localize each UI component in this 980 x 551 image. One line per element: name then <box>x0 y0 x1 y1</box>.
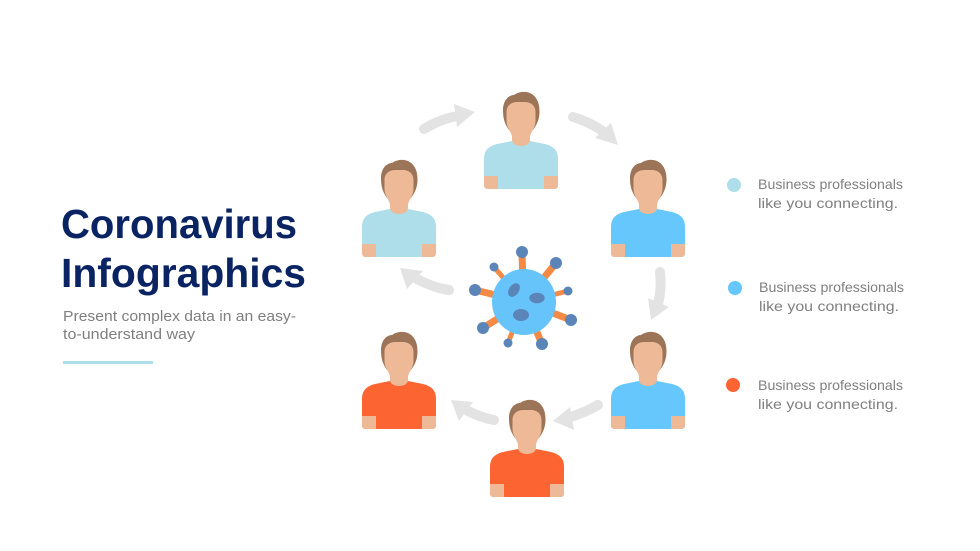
legend item: blue <box>728 279 904 314</box>
title: Coronavirus <box>61 201 297 247</box>
person: lower right, blue <box>611 332 685 429</box>
title underline <box>63 361 153 364</box>
subtitle: Present complex data in an easy- <box>63 308 296 325</box>
title: Infographics <box>61 250 306 296</box>
legend item: light blue: Business professionals <box>758 176 903 192</box>
icon: virus <box>469 246 577 350</box>
arrow: top to upper right <box>573 117 618 145</box>
person: upper left, light blue <box>362 160 436 257</box>
legend item: orange <box>726 377 903 412</box>
subtitle <box>63 308 296 343</box>
arrow: lower right to bottom <box>553 405 598 430</box>
arrow: upper right to lower right <box>648 272 669 320</box>
title <box>61 201 306 296</box>
arrow: upper left to top <box>424 104 475 129</box>
person: lower left, orange <box>362 332 436 429</box>
legend item: orange: Business professionals <box>758 377 903 393</box>
arrow: lower left to upper left <box>400 268 449 290</box>
legend item: blue: Business professionals <box>759 279 904 295</box>
arrow: bottom to lower left <box>451 400 494 421</box>
subtitle: to-understand way <box>63 326 196 343</box>
legend item: blue: like you connecting. <box>759 298 899 314</box>
legend item: light blue: like you connecting. <box>758 195 898 211</box>
person: top, light blue <box>484 92 558 189</box>
legend item: light blue <box>727 176 903 211</box>
legend item: orange: like you connecting. <box>758 396 898 412</box>
person: upper right, blue <box>611 160 685 257</box>
person: bottom, orange <box>490 400 564 497</box>
